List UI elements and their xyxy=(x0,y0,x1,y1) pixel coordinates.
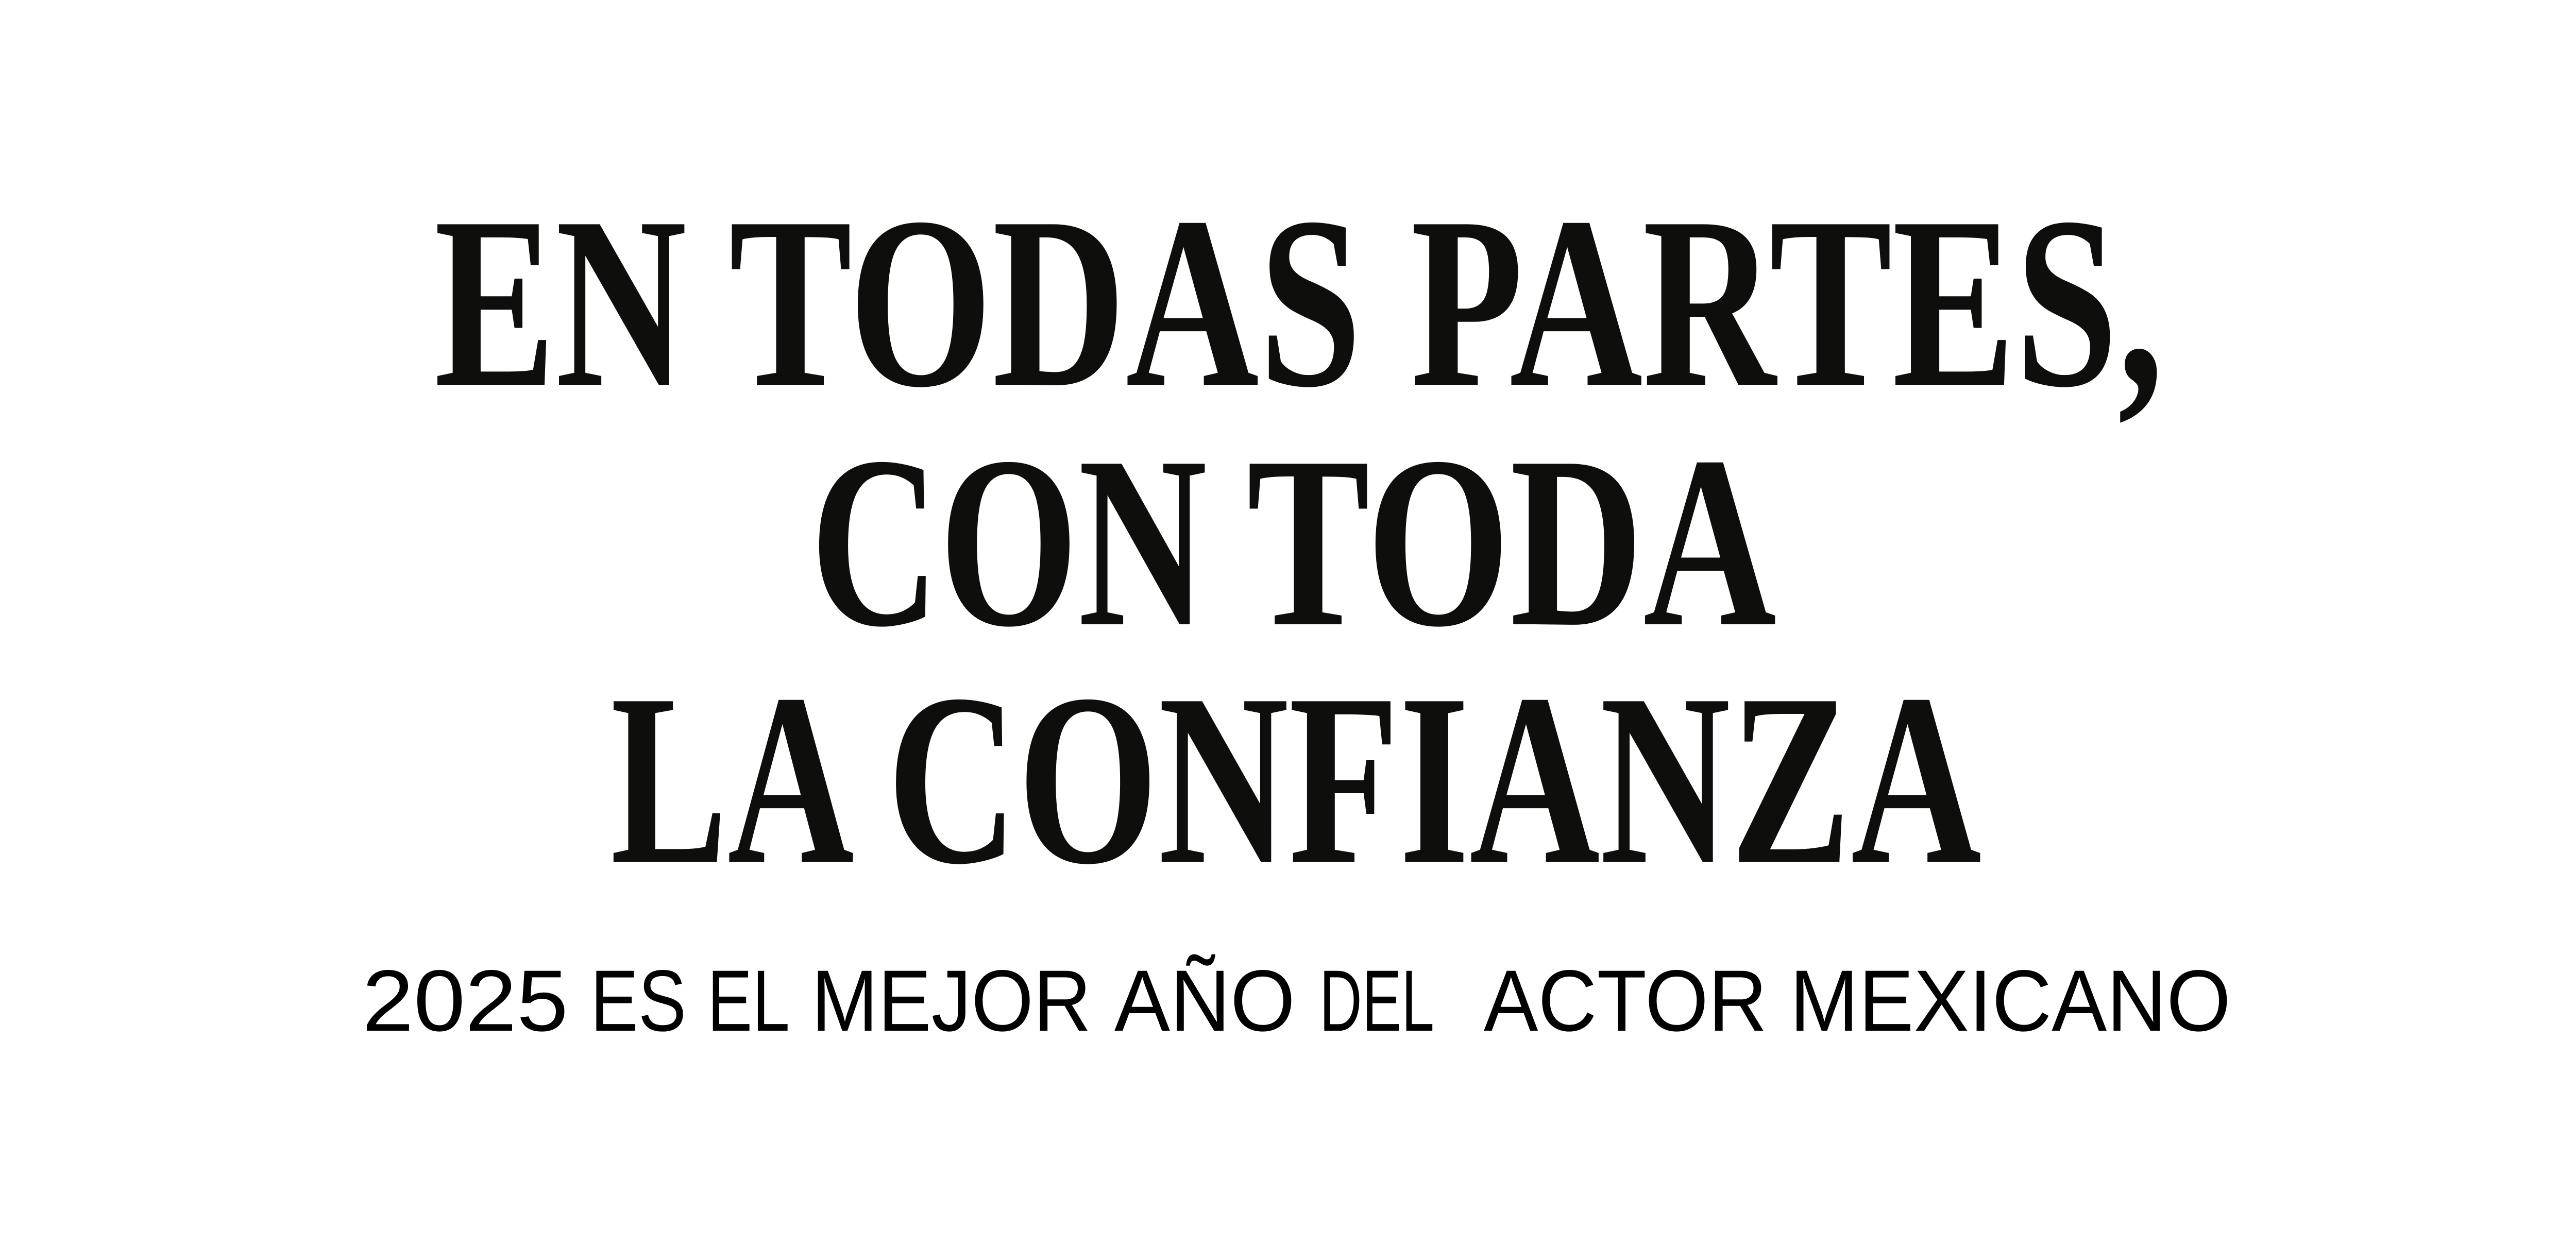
subtitle: MEXICANO xyxy=(1790,952,2231,1049)
title line 1: PARTES, xyxy=(1411,166,2164,438)
subtitle: MEJOR xyxy=(811,952,1091,1049)
title line 1: TODAS xyxy=(729,166,1362,438)
title line 3 xyxy=(611,643,1981,915)
subtitle: DEL xyxy=(1319,952,1434,1049)
subtitle xyxy=(362,952,2231,1049)
title xyxy=(434,166,2164,915)
subtitle: 2025 xyxy=(362,952,568,1049)
subtitle: AÑO xyxy=(1114,952,1295,1049)
title line 2: CON xyxy=(810,406,1207,677)
title line 1 xyxy=(434,166,2164,438)
subtitle: EL xyxy=(707,952,790,1049)
title line 2: TODA xyxy=(1247,406,1776,677)
subtitle: ACTOR xyxy=(1484,952,1767,1049)
title line 2 xyxy=(810,406,1776,677)
title line 1: EN xyxy=(434,166,687,438)
subtitle: ES xyxy=(590,952,686,1049)
title line 3: CONFIANZA xyxy=(887,643,1981,915)
title line 3: LA xyxy=(611,643,854,915)
